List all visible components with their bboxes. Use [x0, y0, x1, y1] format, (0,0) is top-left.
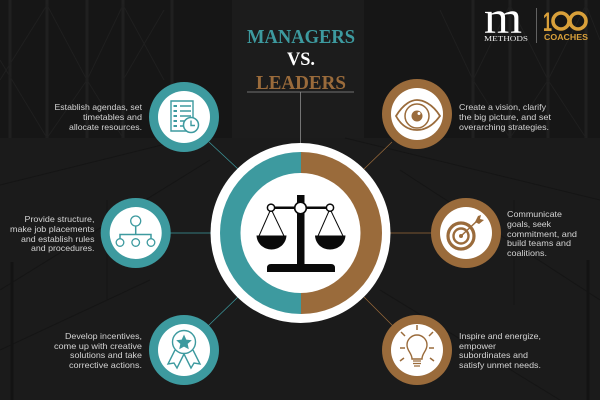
text: inspire and energize: [459, 331, 541, 370]
text: provide structure: and procedures.: [31, 243, 94, 253]
text: establish agendas: [54, 102, 143, 132]
title: [247, 26, 355, 94]
text: develop incentives: come up with creative: [54, 341, 142, 351]
icon: balance scales: [256, 195, 346, 272]
text: communicate goals: coalitions.: [507, 248, 547, 258]
text: provide structure: [10, 214, 95, 253]
title underline and stem: [247, 92, 354, 145]
text: inspire and energize: Inspire and energize,: [459, 331, 541, 341]
logo: Methods and 100 Coaches: 1: [543, 7, 552, 37]
node: lightbulb icon: [382, 315, 452, 385]
connector lines teal: [170, 142, 238, 326]
text: establish agendas: allocate resources.: [69, 122, 142, 132]
text: develop incentives: [54, 331, 142, 370]
text: develop incentives: solutions and take: [70, 350, 142, 360]
text: establish agendas: Establish agendas, set: [54, 102, 143, 112]
text: create a vision: [459, 102, 552, 132]
title: VS.: [287, 49, 315, 70]
text: provide structure: and establish rules: [21, 234, 94, 244]
central scales emblem: [210, 143, 390, 323]
node: structure icon: [101, 198, 171, 268]
connector lines brown: [364, 142, 431, 326]
text: establish agendas: timetables and: [83, 112, 142, 122]
text: communicate goals: build teams and: [507, 238, 571, 248]
title: LEADERS: [256, 72, 346, 94]
text: communicate goals: [507, 209, 577, 258]
text: communicate goals: commitment, and: [507, 229, 577, 239]
node: agendas icon: [149, 82, 219, 152]
text: inspire and energize: empower: [459, 341, 496, 351]
text: communicate goals: Communicate: [507, 209, 562, 219]
node: target icon: [431, 198, 501, 268]
node: vision eye icon: [382, 79, 452, 149]
text: create a vision: overarching strategies.: [459, 122, 549, 132]
text: inspire and energize: subordinates and: [459, 350, 528, 360]
node: award icon: [149, 315, 219, 385]
logo: Methods and 100 Coaches: COACHES: [544, 33, 589, 42]
text: create a vision: the big picture, and set: [459, 112, 552, 122]
logo: Methods and 100 Coaches: METHODS: [484, 34, 528, 43]
text: inspire and energize: satisfy unmet needs.: [459, 360, 541, 370]
text: provide structure: make job placements: [10, 224, 95, 234]
title: MANAGERS: [247, 26, 355, 48]
text: develop incentives: corrective actions.: [69, 360, 142, 370]
text: provide structure: Provide structure,: [24, 214, 94, 224]
text: develop incentives: Develop incentives,: [65, 331, 142, 341]
text: communicate goals: goals, seek: [507, 219, 552, 229]
logo: Methods and 100 Coaches: [484, 0, 589, 43]
text: create a vision: Create a vision, clarify: [459, 102, 547, 112]
